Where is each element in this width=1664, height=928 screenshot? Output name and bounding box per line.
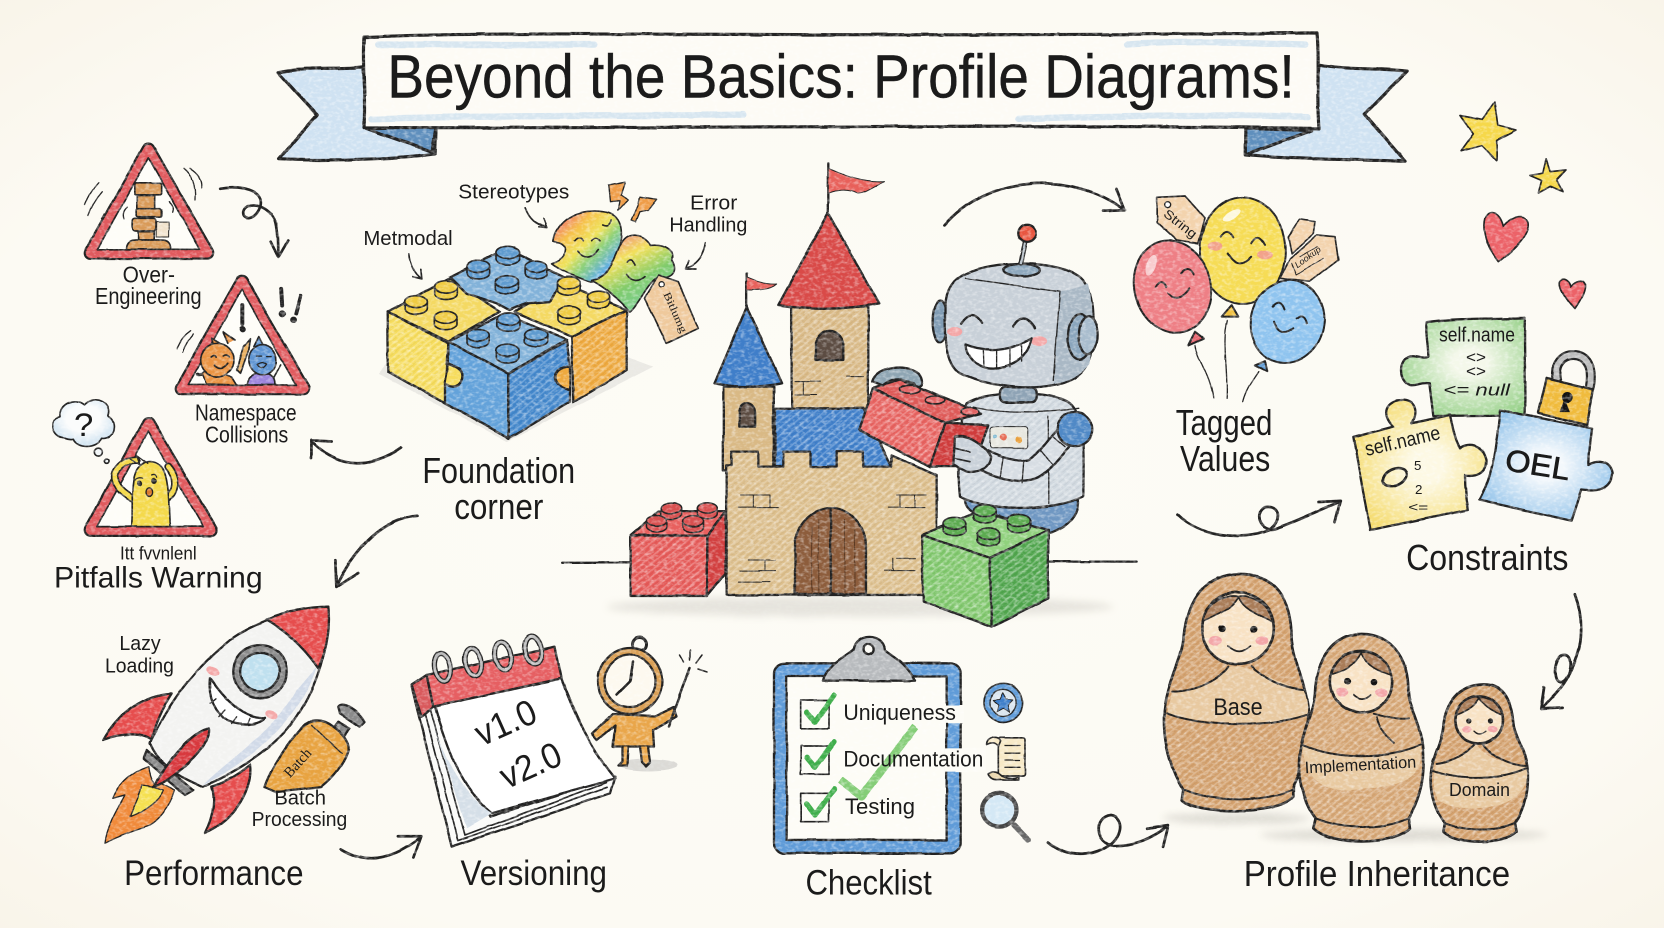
puzzle text bbox=[1363, 325, 1572, 515]
label: stereotypes: Stereotypes bbox=[458, 181, 569, 203]
puzzle text: self.name bbox=[1363, 422, 1442, 461]
calendar versions bbox=[468, 691, 568, 797]
error handling arrow bbox=[686, 243, 706, 269]
foundation labels bbox=[363, 181, 689, 336]
clock person bbox=[592, 637, 707, 771]
arrow: constraints to inheritance bbox=[1541, 594, 1581, 709]
label: lazy loading bbox=[105, 632, 174, 678]
tag text: Lookup bbox=[1293, 244, 1323, 270]
banner left tail bbox=[278, 67, 436, 160]
label: error handling: Handling bbox=[669, 214, 747, 237]
green lego block bbox=[922, 505, 1048, 627]
label: small caption: Itt fvvnlenl bbox=[120, 542, 197, 563]
panel: checklist bbox=[774, 637, 1028, 903]
doll labels: Domain bbox=[1449, 779, 1510, 800]
tower with red roof bbox=[778, 163, 885, 410]
rocket bbox=[103, 607, 329, 843]
label: lazy loading: Lazy bbox=[119, 632, 161, 655]
doll: implementation bbox=[1299, 634, 1424, 841]
warning triangle: over-engineering bbox=[85, 149, 207, 253]
performance labels bbox=[105, 632, 568, 831]
label: batch processing: Processing bbox=[252, 808, 347, 831]
tags bbox=[1157, 196, 1338, 282]
panel: profile inheritance bbox=[1163, 574, 1547, 894]
studs bbox=[405, 246, 610, 363]
warning triangle: namespace collisions bbox=[177, 282, 303, 388]
heading: tagged values bbox=[1176, 402, 1272, 479]
doll: domain bbox=[1431, 684, 1528, 842]
panel: castle and robot bbox=[562, 163, 1137, 627]
tag bbox=[645, 275, 698, 343]
castle wall bbox=[727, 452, 937, 595]
arrow: foundation to namespace collisions bbox=[311, 440, 401, 463]
blue balloon bbox=[1241, 272, 1334, 372]
blue puzzle piece bbox=[1479, 410, 1613, 521]
arrow: castle to tagged values bbox=[944, 183, 1125, 225]
panel: performance bbox=[103, 607, 707, 893]
heading: foundation corner: corner bbox=[454, 486, 543, 527]
tag text: String bbox=[1161, 207, 1200, 241]
panel: tagged values bbox=[1124, 103, 1585, 479]
panel: pitfalls warning bbox=[53, 149, 303, 594]
checklist items: Testing bbox=[845, 794, 915, 819]
tag text: Bitlumg bbox=[661, 291, 689, 336]
label: namespace collisions bbox=[195, 400, 297, 447]
banner right tail bbox=[1246, 65, 1407, 161]
heading: foundation corner: Foundation bbox=[422, 450, 575, 491]
checklist items bbox=[843, 700, 983, 819]
stars bbox=[1460, 103, 1566, 193]
red block held by robot bbox=[859, 380, 988, 467]
green puzzle piece bbox=[1401, 318, 1525, 416]
red balloon bbox=[1124, 232, 1222, 345]
puzzle text: 5 bbox=[1414, 458, 1421, 473]
heading: foundation corner bbox=[422, 450, 575, 527]
lightning sparks bbox=[608, 182, 657, 222]
robot bbox=[933, 224, 1098, 533]
tower with blue roof bbox=[714, 274, 782, 470]
headings: performance, versioning: Performance bbox=[124, 854, 304, 893]
red lego block bbox=[631, 503, 726, 596]
blue wall bbox=[775, 408, 892, 467]
yellow balloon bbox=[1200, 197, 1285, 317]
label: batch processing: Batch bbox=[274, 786, 326, 809]
tag text bbox=[1161, 207, 1323, 270]
puzzle text: <= bbox=[1408, 500, 1429, 515]
calendar bbox=[412, 635, 615, 847]
orange block bbox=[515, 283, 627, 402]
label: batch processing bbox=[252, 786, 347, 831]
batch tank bbox=[265, 705, 365, 792]
heading: constraints: Constraints bbox=[1406, 537, 1568, 578]
yellow block bbox=[388, 278, 500, 403]
label: over-engineering: Engineering bbox=[95, 283, 202, 309]
robot hands bbox=[873, 368, 991, 472]
label: over-engineering: Over- bbox=[123, 262, 175, 288]
puzzle text: <> bbox=[1466, 350, 1486, 367]
label: namespace collisions: Collisions bbox=[205, 421, 288, 447]
pitfalls labels bbox=[54, 262, 297, 594]
panel: constraints bbox=[1353, 318, 1613, 578]
label: lazy loading: Loading bbox=[105, 655, 174, 678]
puzzle text: OEL bbox=[1503, 443, 1572, 487]
thought cloud bbox=[53, 400, 114, 463]
label: error handling bbox=[669, 191, 747, 237]
warning triangle: pitfalls bbox=[91, 424, 211, 530]
hearts bbox=[1484, 213, 1585, 309]
arrow bbox=[221, 187, 288, 257]
label: namespace collisions: Namespace bbox=[195, 400, 297, 426]
puzzle text: <= null bbox=[1443, 381, 1512, 400]
clipboard bbox=[774, 637, 985, 853]
puzzle text: self.name bbox=[1439, 325, 1515, 347]
banner main ribbon bbox=[363, 33, 1319, 128]
arrow: tagged values to constraints bbox=[1178, 501, 1340, 536]
headings: performance, versioning bbox=[124, 854, 607, 893]
heading: tagged values: Values bbox=[1180, 438, 1270, 479]
front blue block bbox=[445, 313, 570, 438]
castle door bbox=[795, 508, 866, 594]
rainbow stereotype pieces bbox=[552, 211, 675, 312]
doll labels bbox=[1213, 694, 1510, 800]
label: metmodal: Metmodal bbox=[363, 228, 453, 250]
arrow: performance to versioning bbox=[341, 836, 421, 858]
back blue block bbox=[450, 248, 563, 310]
title text: Beyond the Basics: Profile Diagrams! bbox=[387, 43, 1295, 112]
robot head bbox=[945, 224, 1098, 387]
puzzle text: 2 bbox=[1415, 482, 1422, 497]
puzzle text: <> bbox=[1466, 364, 1486, 381]
heading: pitfalls warning: Pitfalls Warning bbox=[54, 561, 263, 594]
badge bbox=[984, 683, 1023, 722]
faint large check bbox=[840, 727, 915, 797]
title banner bbox=[278, 33, 1407, 161]
arrow: foundation to performance bbox=[335, 516, 417, 587]
calendar versions: v1.0 bbox=[468, 691, 543, 754]
label: error handling: Error bbox=[690, 191, 737, 214]
heading: checklist: Checklist bbox=[805, 864, 932, 903]
label: over-engineering bbox=[95, 262, 202, 309]
checklist items: Documentation bbox=[843, 747, 983, 772]
flow arrows bbox=[311, 183, 1581, 858]
doll labels: Base bbox=[1213, 694, 1263, 721]
doll: base bbox=[1164, 574, 1308, 811]
magnifier bbox=[983, 793, 1028, 840]
padlock bbox=[1538, 355, 1593, 425]
heading: tagged values: Tagged bbox=[1176, 402, 1272, 443]
calendar versions: v2.0 bbox=[493, 733, 568, 797]
balloon strings bbox=[1195, 320, 1258, 402]
checkboxes bbox=[801, 700, 829, 822]
yellow puzzle piece bbox=[1353, 400, 1486, 530]
panel: foundation corner bbox=[363, 181, 698, 527]
pointer arrows bbox=[409, 208, 547, 279]
doll labels: Implementation bbox=[1304, 752, 1417, 777]
question mark: ? bbox=[74, 407, 93, 443]
heading: profile inheritance: Profile Inheritance bbox=[1244, 853, 1510, 894]
headings: performance, versioning: Versioning bbox=[461, 854, 607, 893]
scroll bbox=[987, 737, 1025, 780]
checklist items: Uniqueness bbox=[843, 700, 956, 725]
robot arm bbox=[983, 433, 1068, 483]
tank text: Batch bbox=[281, 745, 316, 781]
arrow: checklist to inheritance bbox=[1047, 815, 1168, 855]
